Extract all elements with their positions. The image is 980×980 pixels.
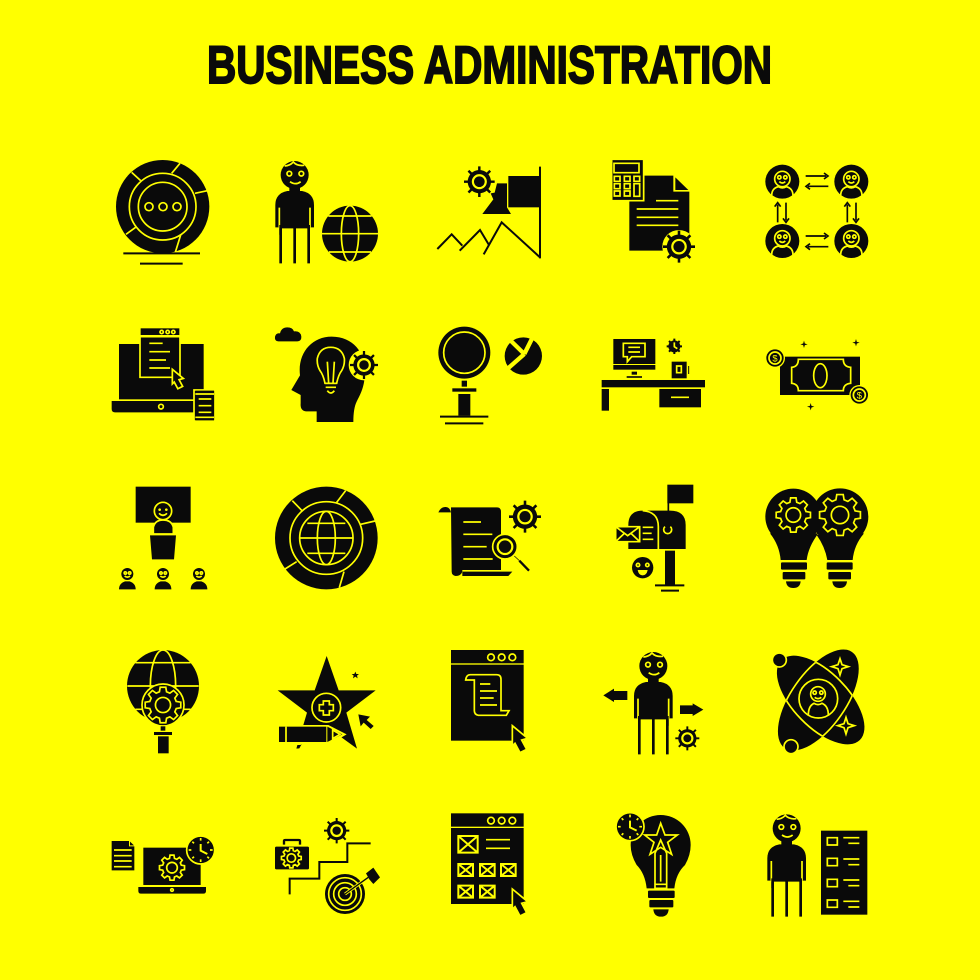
cloud xyxy=(275,327,301,341)
person xyxy=(634,652,673,754)
document xyxy=(629,176,689,251)
envelope xyxy=(616,527,640,542)
smiley xyxy=(632,557,653,578)
icon: browser window with checkboxes xyxy=(451,813,528,916)
icon: head with bulb, gear and cloud xyxy=(275,327,379,422)
web document xyxy=(140,328,180,377)
clock xyxy=(616,813,644,841)
banknote xyxy=(780,357,860,395)
gear xyxy=(324,818,349,843)
phone xyxy=(194,390,215,421)
stairs xyxy=(290,843,371,894)
person xyxy=(808,687,828,715)
icon: globe in wheel xyxy=(275,487,378,589)
icon: person with checklist xyxy=(767,814,867,917)
speaker xyxy=(150,502,176,559)
bulb xyxy=(317,347,344,393)
target xyxy=(325,868,380,914)
gear xyxy=(675,726,699,750)
mountains xyxy=(437,222,540,257)
icon: document, calculator and gear xyxy=(612,159,696,263)
icon: globe with gear on stand xyxy=(127,650,199,753)
window xyxy=(451,650,524,741)
planets xyxy=(772,653,798,754)
scroll xyxy=(438,507,512,576)
icon: desk with monitor xyxy=(602,339,705,411)
icon: person and globe xyxy=(275,161,378,263)
icon: atom with person xyxy=(773,650,864,753)
gear xyxy=(349,350,379,380)
icon: browser window with scroll xyxy=(451,650,528,753)
icon: briefcase, stairs and target xyxy=(275,818,380,914)
flag xyxy=(508,176,539,207)
bulb xyxy=(631,815,691,917)
gear xyxy=(464,166,495,197)
pie chart xyxy=(505,335,542,375)
cup xyxy=(672,362,689,378)
globe xyxy=(127,650,199,722)
monitor xyxy=(613,339,655,377)
person silhouette xyxy=(482,183,511,214)
magnifier xyxy=(493,534,529,571)
scroll xyxy=(466,675,509,715)
gear lens xyxy=(142,684,184,726)
clock xyxy=(187,836,215,864)
laptop xyxy=(119,344,204,399)
screen xyxy=(136,487,191,523)
icon: magnifier and pie chart xyxy=(438,327,542,423)
calculator xyxy=(612,159,644,201)
coin: $ xyxy=(857,390,863,400)
stand xyxy=(154,726,172,753)
gear xyxy=(509,501,541,533)
small star xyxy=(352,672,359,678)
icon: bulb with star pencil and clock xyxy=(616,813,691,917)
icon: twin bulbs with gears xyxy=(765,488,868,588)
head xyxy=(291,337,365,422)
star xyxy=(278,656,376,749)
magnifier xyxy=(438,327,490,423)
coin: $ xyxy=(772,353,778,363)
icon: mailbox with letter xyxy=(616,485,693,591)
title: BUSINESS ADMINISTRATION xyxy=(207,36,772,95)
briefcase xyxy=(275,840,309,869)
icon: banknote and coins xyxy=(765,339,869,410)
icon: flag on mountains with gear xyxy=(437,166,540,258)
window xyxy=(451,813,524,904)
pencil xyxy=(279,725,347,749)
icon: laptop with gear, clock and document xyxy=(112,836,215,894)
star pencil xyxy=(645,823,677,888)
left bulb xyxy=(765,489,821,588)
post xyxy=(655,551,684,591)
globe xyxy=(322,206,378,262)
icon: chat wheel xyxy=(116,160,209,264)
person xyxy=(275,161,314,263)
cursor xyxy=(358,714,374,729)
sparkle xyxy=(832,659,848,675)
desk xyxy=(602,380,705,411)
right arrow xyxy=(680,703,703,716)
gear xyxy=(662,230,696,263)
icon: laptop with document xyxy=(112,328,215,421)
icon: scroll, magnifier and gear xyxy=(438,501,541,576)
mailbox xyxy=(628,511,686,549)
sparkle xyxy=(838,717,854,734)
icon: person with arrows and gear xyxy=(603,652,703,754)
document xyxy=(112,841,134,870)
person xyxy=(767,814,806,917)
flag xyxy=(667,485,693,503)
icon: presenter with audience xyxy=(119,487,207,589)
laptop xyxy=(138,848,206,894)
icon: people exchange network xyxy=(765,165,868,258)
checkboxes xyxy=(458,836,516,898)
checklist xyxy=(821,831,867,915)
icon: star with plus and pencil xyxy=(278,656,376,749)
wheel disc xyxy=(116,160,209,253)
clock xyxy=(667,339,682,354)
left arrow xyxy=(603,689,627,702)
orbit ellipses xyxy=(776,650,864,750)
right bulb xyxy=(812,488,868,588)
